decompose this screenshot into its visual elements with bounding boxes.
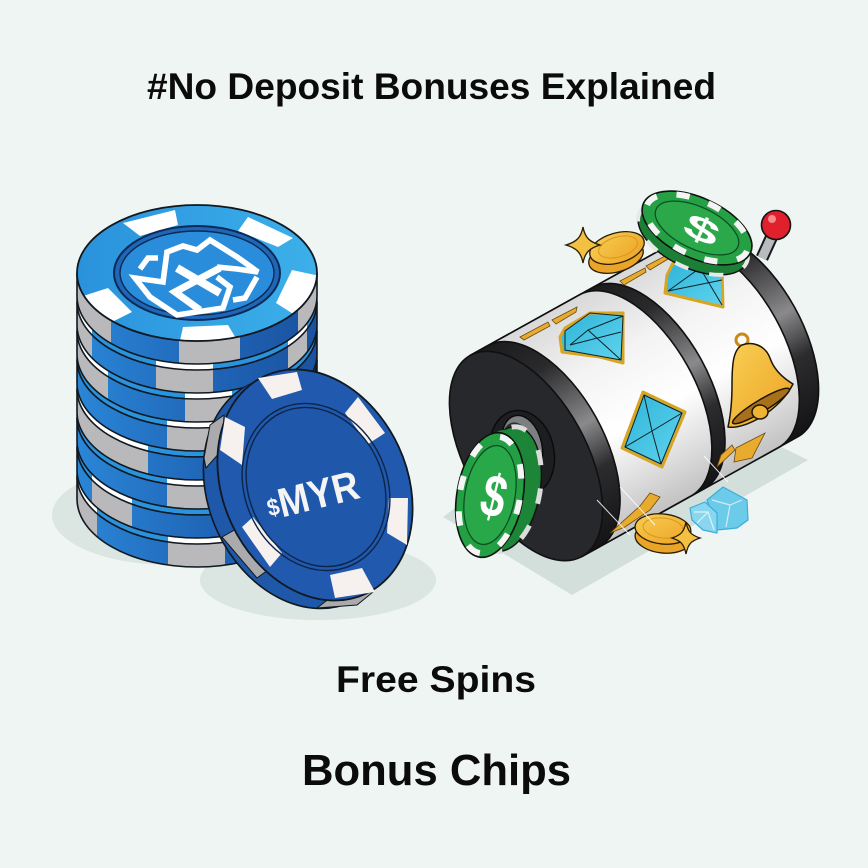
front green chip: [447, 421, 550, 563]
lever: [762, 210, 790, 258]
title: #No Deposit Bonuses Explained: [147, 66, 716, 107]
stacked chips: [76, 272, 318, 568]
top green chip: [627, 176, 763, 290]
icon: blue crystals: [690, 487, 748, 533]
chip label: MYR: [273, 463, 364, 527]
icon: diamond top: [665, 263, 723, 307]
label: free spins: Free Spins: [336, 659, 536, 700]
floor shadow: [443, 400, 808, 595]
icon: shield logo: [135, 240, 258, 315]
gold symbol slivers: [520, 255, 765, 533]
icon: diamond centre: [622, 392, 685, 467]
reel drum: [418, 207, 850, 586]
top green chip: $: [678, 205, 726, 254]
hub: [482, 404, 562, 502]
icon: diamond left: [560, 313, 623, 363]
chip label: $: [264, 492, 283, 522]
front green chip: $: [474, 462, 513, 532]
icon: bell: [728, 334, 793, 428]
label: bonus chips: Bonus Chips: [302, 746, 571, 795]
illustration: bonus chip stack: [52, 205, 449, 641]
sparkles: [597, 456, 728, 535]
chip shadow on ground: [52, 465, 436, 620]
gold coin bottom: [634, 511, 692, 556]
leaning chip with MYR: [167, 337, 449, 641]
illustration: slot machine reels: [418, 176, 850, 595]
icon: gold sparkle star bottom: [672, 522, 700, 554]
gold coin top: [585, 226, 648, 279]
top chip face: [77, 205, 320, 345]
icon: gold sparkle star top: [566, 227, 600, 263]
